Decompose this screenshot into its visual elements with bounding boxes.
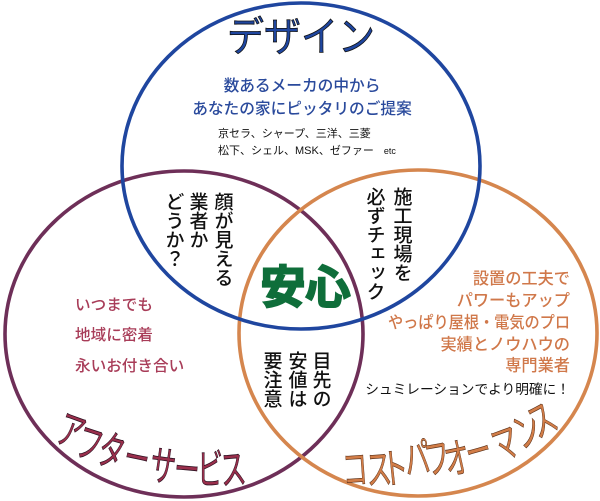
text block: beware of cheap prices: 安値は — [286, 351, 307, 408]
text block: beware of cheap prices: 要注意 — [260, 351, 282, 408]
heading: cost performance: ス — [365, 447, 393, 495]
heading: after service: ス — [219, 447, 248, 495]
callout: simulation: シュミレーションでより明確に！ — [365, 382, 570, 397]
text block: manufacturers: 松下、シェル、MSK、ゼファー etc — [218, 143, 396, 157]
circle: design (blue) — [122, 3, 480, 329]
text block: cost performance description: 専門業者 — [505, 357, 570, 375]
heading: after service: ア — [51, 407, 90, 458]
text block: site check: 必ずチェック — [364, 187, 385, 301]
text block: after service description: 永いお付き合い — [75, 357, 184, 375]
text block: cost performance description: 実績とノウハウの — [440, 336, 570, 354]
text block: cost performance description: パワーもアップ — [457, 292, 570, 310]
heading: cost performance: ン — [507, 406, 549, 458]
heading: after service: ー — [172, 447, 201, 495]
circle: after service (purple) — [5, 171, 363, 497]
heading: cost performance — [341, 395, 565, 495]
heading: cost performance: オ — [440, 435, 475, 485]
heading: cost performance: フ — [421, 435, 454, 485]
text block: site check: 施工現場を — [390, 187, 412, 282]
text block: beware of cheap prices — [260, 351, 331, 408]
center label: peace of mind: 心 — [305, 262, 351, 313]
text block: design description: 数あるメーカの中から — [224, 77, 380, 95]
text block: cost performance description: 設置の工夫で — [473, 270, 570, 288]
text block: site check — [364, 187, 412, 301]
heading: after service: ビ — [197, 448, 223, 494]
text block: manufacturers: 京セラ、シャープ、三洋、三菱 — [218, 126, 371, 140]
text block: after service description: 地域に密着 — [75, 326, 153, 344]
text block: beware of cheap prices: 目先の — [310, 351, 331, 408]
center label: peace of mind: 安 — [260, 262, 306, 313]
text block: can you see their face — [162, 192, 233, 287]
heading: after service: サ — [147, 443, 178, 492]
text block: design description — [192, 77, 412, 118]
heading: cost performance: パ — [401, 435, 433, 484]
heading: cost performance: コ — [341, 447, 369, 495]
heading: after service: タ — [93, 427, 130, 478]
circle: cost performance (orange) — [239, 170, 597, 496]
heading: after service: フ — [70, 420, 108, 471]
text block: cost performance description: やっぱり屋根・電気のプロ — [388, 314, 570, 332]
text block: can you see their face: 業者か — [186, 192, 208, 249]
text block: after service description: いつまでも — [75, 296, 153, 314]
heading: cost performance: マ — [486, 419, 526, 470]
text block: manufacturers — [218, 126, 396, 157]
heading: after service: ー — [119, 435, 154, 485]
text block: design description: あなたの家にピッタリのご提案 — [192, 100, 412, 118]
heading: design: デザイン — [227, 14, 375, 60]
text block: cost performance description — [388, 270, 570, 375]
text block: can you see their face: どうか？ — [162, 192, 184, 268]
heading: cost performance: ー — [460, 427, 497, 478]
heading: after service — [51, 407, 248, 495]
center label: peace of mind — [260, 262, 351, 313]
heading: cost performance: ト — [380, 446, 410, 494]
text block: after service description — [75, 296, 184, 375]
text block: can you see their face: 顔が見える — [212, 192, 233, 287]
heading: cost performance: ス — [521, 395, 565, 448]
